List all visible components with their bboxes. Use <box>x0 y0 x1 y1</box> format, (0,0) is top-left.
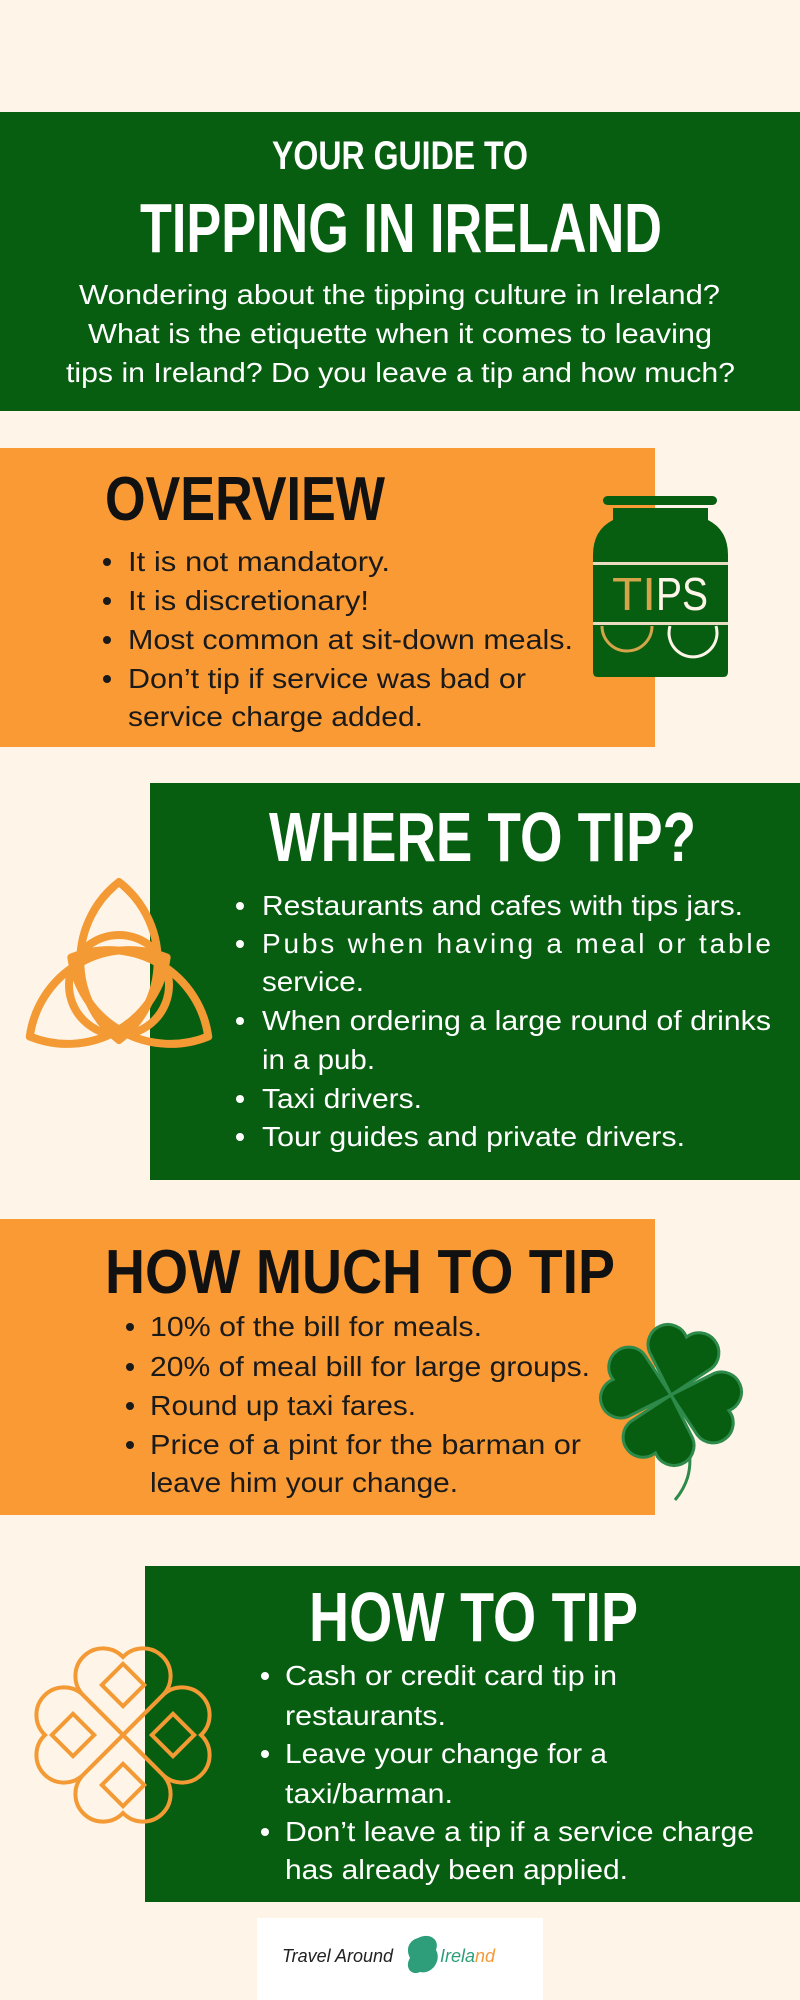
overview bullets: It is discretionary! <box>128 585 369 616</box>
how much bullets: 10% of the bill for meals. <box>150 1311 482 1342</box>
intro text: Wondering about the tipping culture in Ireland? <box>79 279 720 310</box>
icon: celtic knot <box>36 1648 210 1822</box>
how much bullets: Price of a pint for the barman or <box>150 1429 581 1460</box>
heading: overview: OVERVIEW <box>105 465 385 534</box>
where bullets: Tour guides and private drivers. <box>262 1121 685 1152</box>
icon: tips jar: TI <box>612 568 656 620</box>
intro text <box>66 279 735 388</box>
where bullets: service. <box>262 966 364 997</box>
where bullets: Taxi drivers. <box>262 1083 422 1114</box>
icon: tips jar: PS <box>656 568 708 620</box>
how to bullets <box>261 1660 754 1885</box>
panel: how to tip <box>145 1566 800 1902</box>
overview bullets: It is not mandatory. <box>128 546 390 577</box>
intro text: tips in Ireland? Do you leave a tip and how much? <box>66 357 735 388</box>
where bullets <box>236 890 771 1152</box>
how to bullets: taxi/barman. <box>285 1778 453 1809</box>
logo: Ireland <box>440 1946 496 1966</box>
where bullets: Pubs when having a meal or table <box>262 928 771 959</box>
panel: where to tip <box>150 783 800 1180</box>
panel: overview <box>0 448 655 747</box>
icon: tips jar <box>593 496 728 677</box>
logo: Travel Around <box>282 1946 394 1966</box>
icon: triquetra <box>10 882 228 1070</box>
heading: how to tip: HOW TO TIP <box>309 1578 638 1656</box>
how much bullets <box>126 1311 590 1498</box>
overview bullets: service charge added. <box>128 701 423 732</box>
where bullets: When ordering a large round of drinks <box>262 1005 771 1036</box>
how to bullets: has already been applied. <box>285 1854 628 1885</box>
header panel <box>0 112 800 411</box>
where bullets: Restaurants and cafes with tips jars. <box>262 890 743 921</box>
logo <box>257 1918 543 2000</box>
where bullets: in a pub. <box>262 1044 375 1075</box>
heading: where to tip: WHERE TO TIP? <box>269 798 696 876</box>
subtitle: your guide to: YOUR GUIDE TO <box>272 134 528 178</box>
icon: shamrock <box>596 1320 746 1500</box>
overview bullets <box>103 546 573 732</box>
how to bullets: Don’t leave a tip if a service charge <box>285 1816 754 1847</box>
how to bullets: Leave your change for a <box>285 1738 607 1769</box>
how much bullets: Round up taxi fares. <box>150 1390 416 1421</box>
how much bullets: leave him your change. <box>150 1467 458 1498</box>
how to bullets: Cash or credit card tip in <box>285 1660 617 1691</box>
how to bullets: restaurants. <box>285 1700 446 1731</box>
heading: how much to tip: HOW MUCH TO TIP <box>105 1238 615 1307</box>
overview bullets: Most common at sit-down meals. <box>128 624 573 655</box>
how much bullets: 20% of meal bill for large groups. <box>150 1351 590 1382</box>
panel: how much to tip <box>0 1219 655 1515</box>
intro text: What is the etiquette when it comes to leaving <box>88 318 712 349</box>
overview bullets: Don’t tip if service was bad or <box>128 663 526 694</box>
